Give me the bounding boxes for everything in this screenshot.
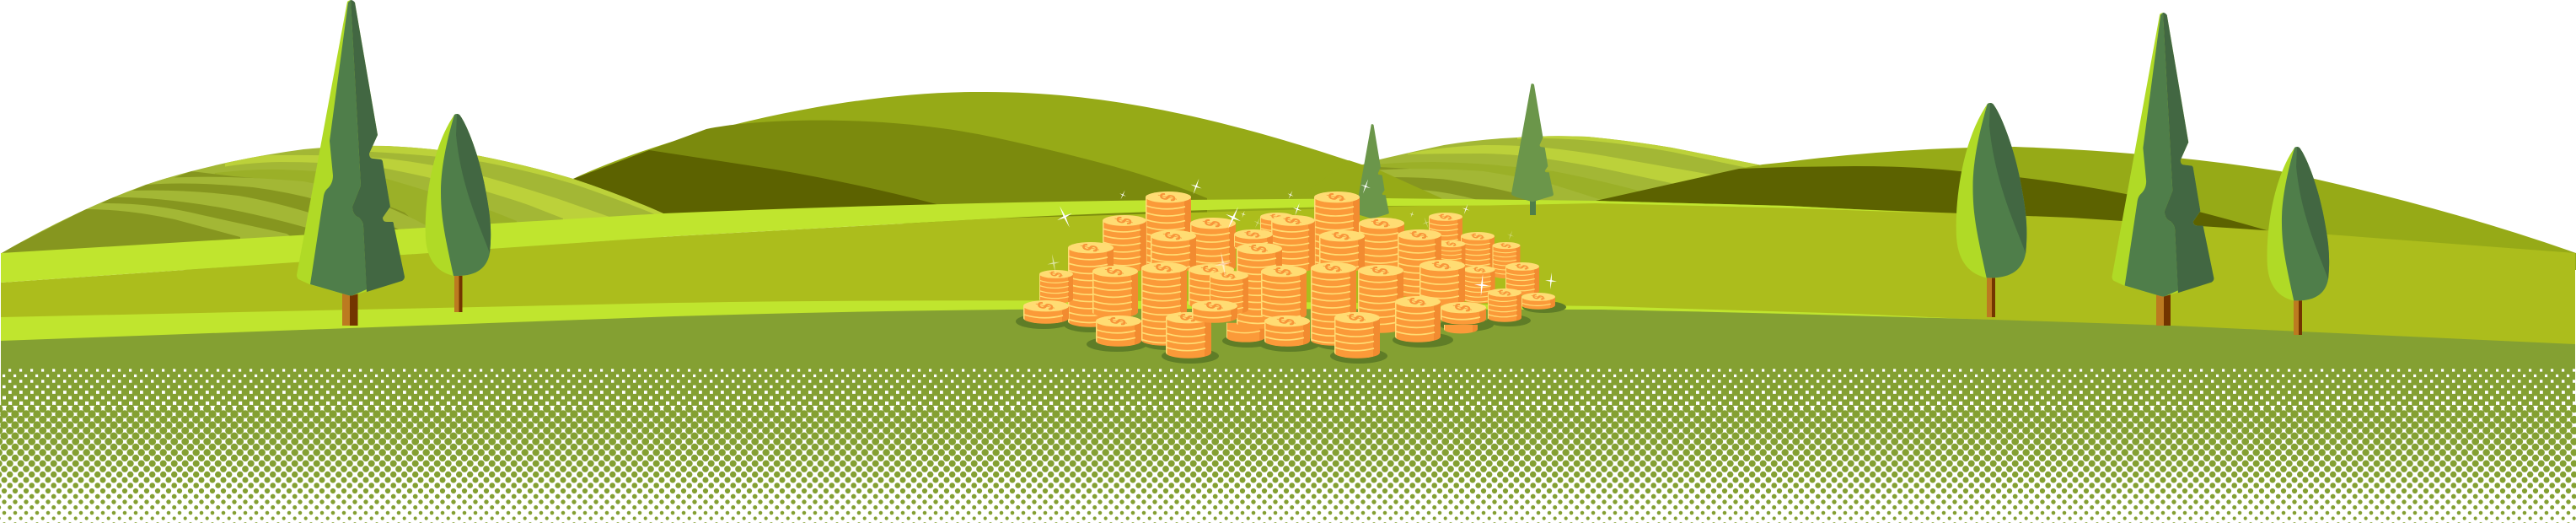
coin stacks: back rows: $: [1280, 214, 1305, 227]
field: green foreground: [1, 309, 2575, 406]
coin stacks: middle rows: $: [1101, 265, 1128, 278]
coin stacks: front rows: $: [1403, 295, 1430, 308]
coin stacks: back rows: $: [1367, 217, 1394, 229]
coin stacks: back rows: $: [1498, 242, 1514, 250]
field: lower lime strip: [1, 300, 2192, 342]
tree: small distant tree, centre: [1355, 124, 1389, 218]
coin stacks: middle rows: $: [1428, 259, 1455, 272]
coin stacks: back rows: $: [1328, 229, 1355, 242]
coin pile: [1016, 191, 1566, 364]
hill: large centre hill: [556, 92, 1602, 224]
field: olive band: [1, 201, 2575, 354]
coin stacks: back rows: $: [1242, 229, 1264, 240]
field: upper lime strip: [1, 198, 1939, 283]
coin stacks: back rows: $: [1111, 214, 1136, 227]
coin stacks: front rows: $: [1449, 301, 1476, 314]
coin stacks: middle rows: $: [1469, 266, 1488, 274]
coin stacks: back rows: $: [1245, 242, 1272, 255]
tree: tall tree, right: [2112, 13, 2214, 326]
coin stacks: back rows: $: [1076, 241, 1103, 254]
coin stacks: front rows: $: [1528, 293, 1548, 301]
coin shadows: [1016, 301, 1566, 364]
coin stacks: middle rows: $: [1046, 270, 1065, 278]
tree: tall tree, left: [297, 0, 405, 326]
coin stacks: middle rows: $: [1512, 262, 1532, 271]
coin stacks: middle rows: $: [1217, 270, 1240, 281]
coin stacks: front rows: $: [1200, 299, 1227, 312]
coin stacks: back rows: $: [1406, 229, 1431, 241]
tree: distant tree, centre-right: [1511, 84, 1554, 215]
coin stacks: back rows: $: [1154, 191, 1181, 203]
halftone: fading green dots: [0, 408, 2576, 523]
coin stacks: middle rows: [1039, 259, 1539, 346]
tree: round tree, far right: [2267, 147, 2329, 335]
hill: centre hill right slope over the striped field: [1264, 160, 1450, 224]
coin stacks: middle rows: $: [1319, 262, 1346, 274]
coin stacks: back rows: $: [1267, 213, 1286, 221]
coin stacks: back rows: $: [1159, 229, 1186, 242]
tree: round tree, left: [426, 114, 491, 312]
coin stacks: middle rows: $: [1150, 262, 1177, 274]
coin stacks: front rows: [1023, 288, 1555, 359]
coin stacks: back rows: $: [1443, 240, 1459, 248]
hill: striped left field: [0, 139, 674, 274]
coin stacks: front rows: $: [1032, 299, 1059, 312]
coin stacks: back rows: $: [1468, 232, 1487, 240]
coin stacks: front rows: $: [1174, 311, 1201, 324]
hill: striped centre-right field: [1362, 136, 1760, 201]
coin stacks: middle rows: $: [1269, 265, 1296, 278]
halftone: white squares on green: [0, 370, 2576, 403]
coin stacks: middle rows: $: [1197, 263, 1224, 276]
coin stacks: front rows: $: [1104, 315, 1131, 327]
coin stacks: front rows: $: [1495, 288, 1514, 297]
sparkles around the coins: [1046, 176, 1558, 297]
coin stacks: back rows: $: [1199, 217, 1226, 229]
coin stacks: back rows: $: [1323, 191, 1350, 203]
coin stacks: back rows: [1068, 191, 1520, 342]
coin stacks: front rows: $: [1343, 311, 1370, 324]
coin stacks: front rows: $: [1273, 315, 1300, 327]
tree: round tree, right: [1956, 103, 2026, 317]
coin stacks: middle rows: $: [1366, 264, 1393, 277]
coin stacks: back rows: $: [1436, 213, 1455, 221]
hill: large right hill: [1596, 147, 2576, 270]
